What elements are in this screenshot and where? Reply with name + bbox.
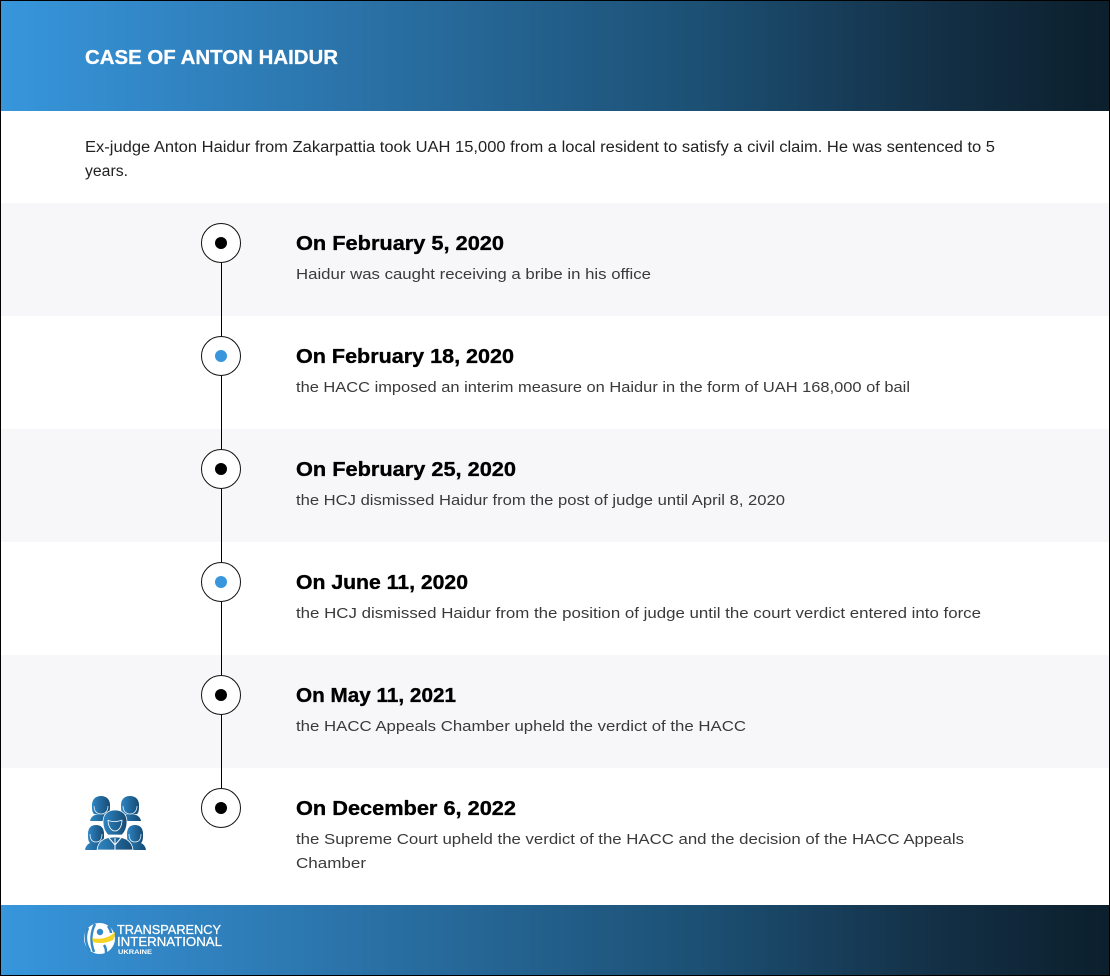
timeline marker 1: [202, 224, 240, 262]
event 1: [296, 233, 651, 283]
timeline marker 4: [202, 562, 240, 602]
event 5: the HACC Appeals Chamber upheld the verdict of the HACC: [296, 718, 746, 735]
timeline marker 3: [202, 450, 240, 488]
row background: May 11, 2021: [1, 655, 1109, 768]
intro text: years.: [85, 163, 128, 180]
timeline line: [220, 243, 222, 808]
row background: February 5, 2020: [1, 203, 1109, 316]
event 1: Haidur was caught receiving a bribe in his office: [296, 266, 651, 283]
header banner: [1, 1, 1109, 111]
timeline marker 6: [202, 788, 240, 828]
event 6: the Supreme Court upheld the verdict of the HACC and the decision of the HACC Appeals: [296, 831, 964, 848]
event 4: On June 11, 2020: [296, 572, 468, 594]
event 6: Chamber: [296, 855, 366, 872]
event 6: [296, 798, 964, 872]
title: CASE OF ANTON HAIDUR: [85, 47, 339, 69]
event 3: On February 25, 2020: [296, 459, 516, 481]
event 1: On February 5, 2020: [296, 233, 504, 255]
logo: Transparency International Ukraine: [84, 923, 222, 956]
timeline marker 5: [202, 676, 240, 714]
logo: Transparency International Ukraine: TRANSPARENCY: [117, 923, 222, 937]
event 4: the HCJ dismissed Haidur from the position of judge until the court verdict entered into force: [296, 605, 981, 622]
event 3: [296, 459, 785, 509]
event 2: On February 18, 2020: [296, 346, 514, 368]
logo: Transparency International Ukraine: INTERNATIONAL: [117, 935, 222, 949]
event 5: On May 11, 2021: [296, 685, 456, 707]
intro text: [85, 139, 995, 180]
row background: February 25, 2020: [1, 429, 1109, 542]
event 4: [296, 572, 981, 622]
event 2: the HACC imposed an interim measure on Haidur in the form of UAH 168,000 of bail: [296, 379, 910, 396]
intro text: Ex-judge Anton Haidur from Zakarpattia took UAH 15,000 from a local resident to satisfy a civil claim. He was sentenced to 5: [85, 139, 995, 156]
logo: Transparency International Ukraine: UKRAINE: [118, 949, 153, 956]
icon: group of judges: [85, 796, 146, 850]
event 3: the HCJ dismissed Haidur from the post of judge until April 8, 2020: [296, 492, 785, 509]
event 6: On December 6, 2022: [296, 798, 516, 820]
footer banner: [1, 905, 1109, 975]
event 5: [296, 685, 746, 735]
timeline marker 2: [202, 336, 240, 376]
event 2: [296, 346, 910, 396]
